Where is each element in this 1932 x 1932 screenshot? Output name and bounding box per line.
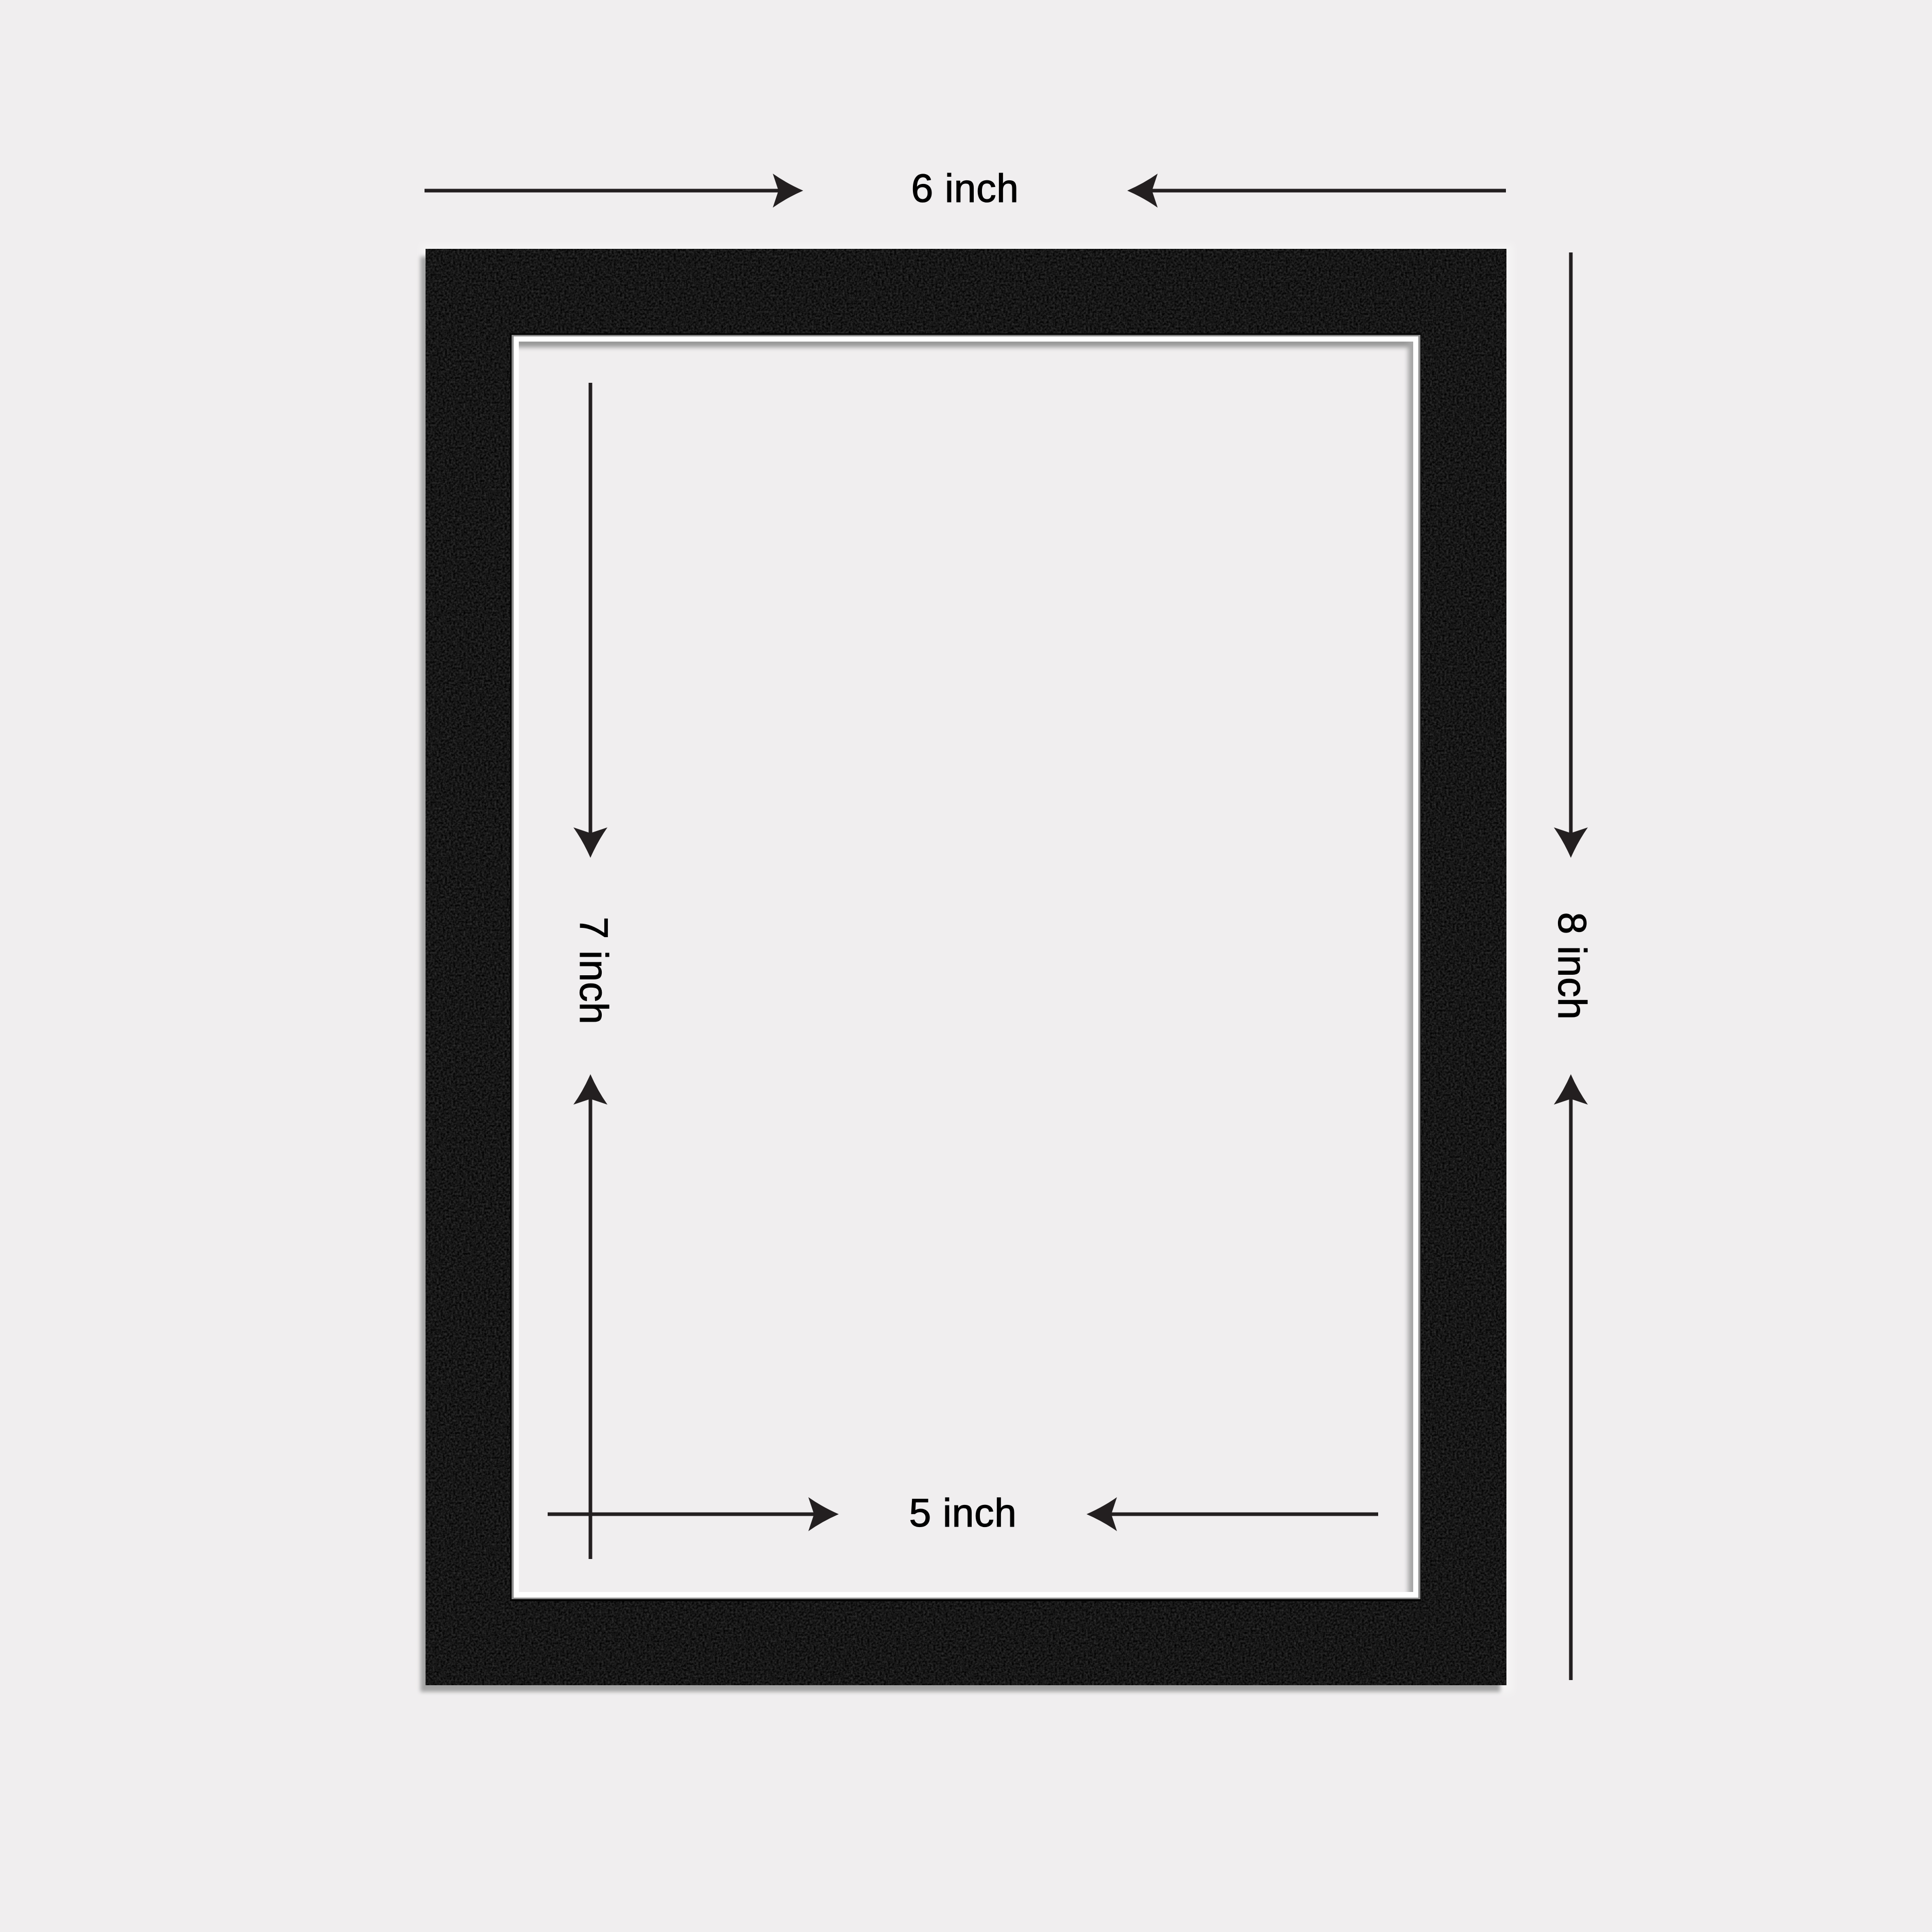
panel: black photo mat with shadow [420,244,1513,1693]
arrow: 7 inch top [573,383,607,858]
arrow: 6 inch left [425,174,803,208]
arrow: 5 inch right [1087,1497,1378,1531]
mat highlight and drop shadow [420,244,1513,1693]
arrow: 6 inch right [1127,174,1506,208]
label: 5 inch: 5 inch [909,1491,1017,1535]
arrow: 8 inch top [1554,252,1588,858]
window cut bevel [510,333,1421,1601]
label: 7 inch: 7 inch [571,917,616,1025]
arrow: 7 inch bottom [573,1074,607,1559]
arrow: 8 inch bottom [1554,1074,1588,1680]
window inner shadow [500,330,1423,1602]
arrow: 5 inch left [548,1497,839,1531]
label: 6 inch: 6 inch [911,166,1019,211]
mat board with grain texture [426,249,1506,1685]
label: 8 inch: 8 inch [1550,912,1594,1020]
